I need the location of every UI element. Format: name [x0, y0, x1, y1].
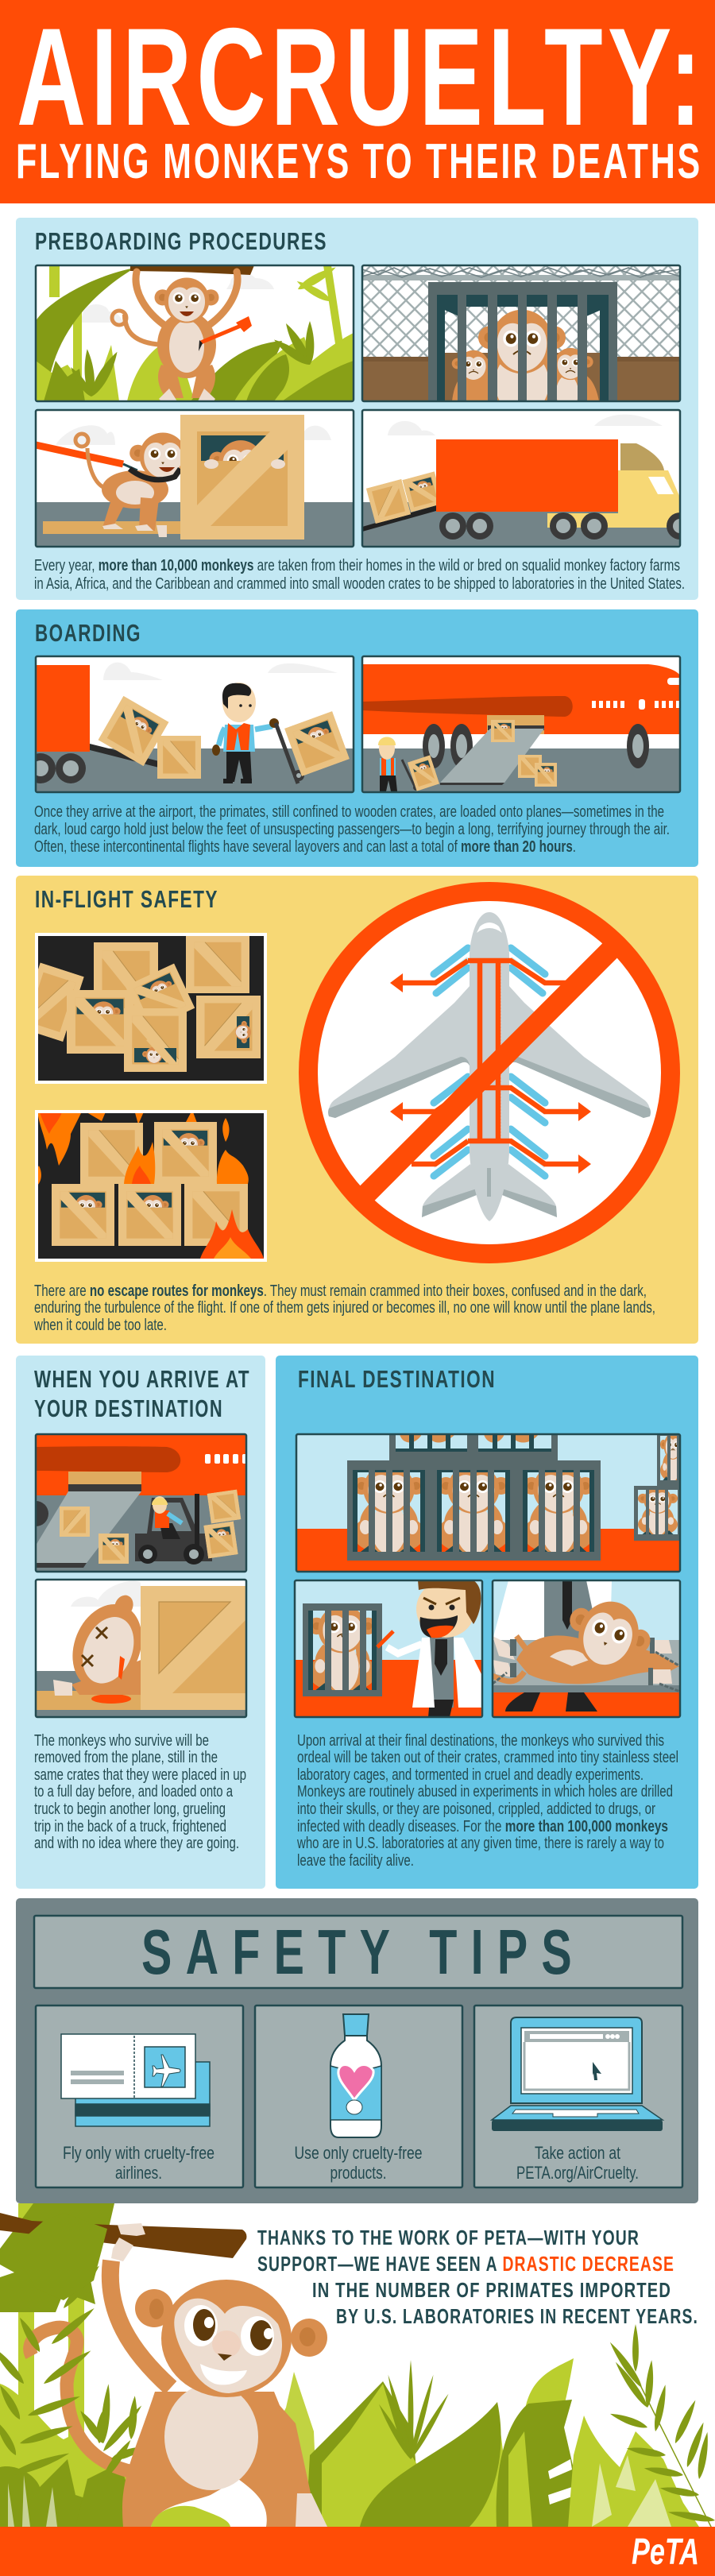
- panel: final destination: [276, 1356, 698, 1889]
- illustration: crates on fire: [35, 1110, 267, 1262]
- caption: Use only cruelty-free: [294, 2143, 423, 2163]
- dart: [199, 316, 252, 351]
- forklift: [135, 1494, 212, 1565]
- caption: airlines.: [115, 2163, 162, 2183]
- heading: when you arrive at your destination: YOUR DESTINATION: [34, 1394, 223, 1422]
- caption: Take action at: [535, 2143, 620, 2163]
- text: arrival: same crates that they were placed in up: [34, 1766, 246, 1784]
- card: fly cruelty-free: [36, 2005, 243, 2187]
- text: arrival: The monkeys who survive will be: [34, 1732, 209, 1750]
- text: boarding: Often, these intercontinental flights have several layovers and can last a total of more than 20 hours.: [34, 838, 576, 856]
- illustration: truck with crates: [362, 410, 694, 547]
- heading: preboarding: PREBOARDING PROCEDURES: [35, 227, 327, 255]
- panel: safety tips: [16, 1898, 698, 2203]
- text: preboarding: [34, 557, 685, 593]
- jungle scene: [0, 2203, 715, 2535]
- illustration: forklift unloading crates: [23, 1434, 248, 1572]
- branch: [130, 265, 254, 275]
- arrows: emergency exit routes: [390, 961, 591, 1174]
- header banner: [0, 0, 715, 203]
- text: arrival: trip in the back of a truck, frightened: [34, 1818, 226, 1835]
- illustration: plane being loaded with crates: [362, 656, 683, 792]
- heading: when you arrive at your destination: WHEN YOU ARRIVE AT: [34, 1365, 250, 1393]
- illustration: scientist with syringe: [295, 1580, 482, 1717]
- illustration: caged monkeys behind fence: [362, 265, 680, 415]
- panel: boarding: [16, 609, 698, 867]
- icon: no-plane sign with exit arrows: [308, 892, 671, 1254]
- prohibition ring: [308, 892, 671, 1254]
- text: arrival: [34, 1732, 246, 1852]
- heading: in-flight safety: IN-FLIGHT SAFETY: [35, 885, 218, 913]
- text: final destination: leave the facility alive.: [297, 1852, 414, 1870]
- icon: laptop: [492, 2017, 663, 2131]
- text: final destination: infected with deadly diseases. For the more than 100,000 monkeys: [297, 1818, 668, 1835]
- heading: when you arrive at your destination: [34, 1365, 250, 1422]
- text: in-flight: [33, 1282, 655, 1334]
- text: arrival: removed from the plane, still in the: [34, 1749, 218, 1766]
- panel: when you arrive: [16, 1356, 265, 1889]
- text: in-flight: when it could be too late.: [33, 1317, 167, 1334]
- text: arrival: truck to begin another long, grueling: [34, 1800, 226, 1818]
- caption: PETA.org/AirCruelty.: [516, 2163, 639, 2183]
- caption: Fly only with cruelty-free: [63, 2143, 214, 2163]
- text: boarding: [34, 803, 670, 856]
- panel: in-flight safety: [16, 876, 698, 1344]
- plants: left bamboo and leaves: [0, 2203, 146, 2527]
- panel: preboarding procedures: [16, 218, 698, 600]
- icon: boarding pass and credit card: [61, 2034, 210, 2126]
- footer bar with PETA logo: [0, 2527, 715, 2576]
- illustration: worker loading crates from truck: [25, 656, 354, 792]
- icon: plane: [328, 912, 651, 1221]
- caption: [63, 2143, 214, 2183]
- card: take action: [474, 2005, 682, 2187]
- plants: right foliage: [270, 2324, 715, 2535]
- text: arrival: and with no idea where they are going.: [34, 1835, 239, 1852]
- small worker with dolly: [378, 737, 439, 791]
- illustration: happy monkey hanging from branch: [0, 2213, 327, 2527]
- heading: boarding: BOARDING: [35, 619, 141, 647]
- illustration: crates in dark hold: [19, 933, 267, 1084]
- illustration: monkey swinging in jungle hit by dart: [36, 264, 354, 401]
- caption: [294, 2143, 423, 2183]
- illustration: monkey strapped to table: [493, 1580, 680, 1717]
- final message: [257, 2226, 698, 2328]
- card: cruelty-free products: [255, 2005, 462, 2187]
- caption: [516, 2143, 639, 2183]
- heading: final destination: FINAL DESTINATION: [298, 1365, 496, 1393]
- illustration: dead monkey fallen from crate: [36, 1580, 246, 1717]
- caption: products.: [330, 2163, 386, 2183]
- icon: bottle with bunny heart: [330, 2014, 381, 2137]
- illustration: stacked lab cages: [296, 1433, 686, 1572]
- branch: [0, 2213, 246, 2258]
- text: arrival: to a full day before, and loaded onto a: [34, 1783, 234, 1800]
- worker: [212, 683, 279, 783]
- illustration: monkey pulled by leash into crate: [36, 410, 354, 547]
- text: final destination: [296, 1732, 678, 1870]
